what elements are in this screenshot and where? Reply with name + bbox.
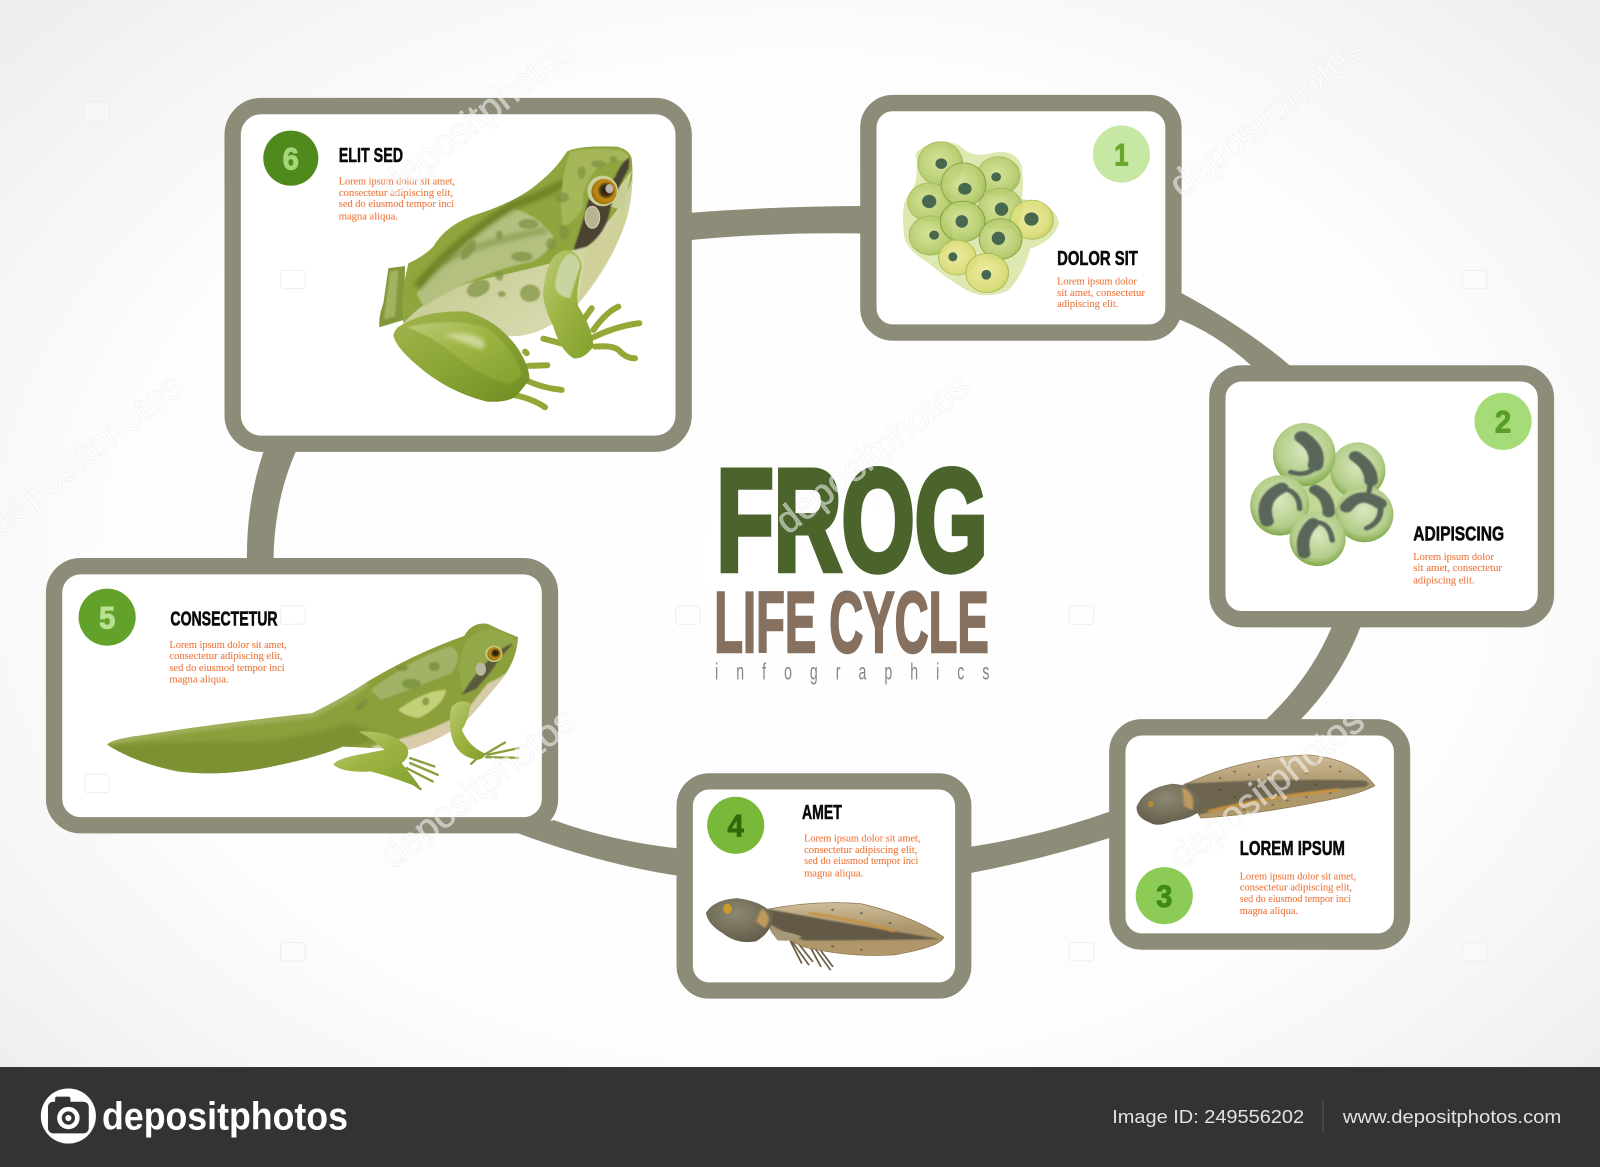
watermark: depositphotos overlay: depositphotos	[372, 27, 583, 205]
number badge 5: 5	[99, 599, 115, 635]
heading: adipiscing: ADIPISCING	[1413, 524, 1504, 546]
number badge 3	[1136, 867, 1193, 924]
text block step 3: Lorem ipsum dolor sit amet,	[1240, 870, 1356, 882]
heading: amet: AMET	[802, 802, 842, 824]
text block step 4	[804, 833, 921, 879]
number badge 4	[707, 797, 764, 854]
heading: elit sed: ELIT SED	[339, 145, 403, 167]
text block step 3: sed do eiusmod tempor inci	[1240, 893, 1351, 905]
text block step 5	[169, 639, 287, 685]
icon: camera logo	[41, 1088, 96, 1144]
illustration: adult frog	[379, 137, 647, 407]
text block step 6: consectetur adipiscing elit,	[339, 187, 453, 199]
number badge 1	[1093, 125, 1150, 183]
text block step 6: sed do eiusmod tempor inci	[339, 198, 454, 210]
image id: Image ID: 249556202	[1112, 1106, 1304, 1127]
heading: lorem ipsum: LOREM IPSUM	[1240, 838, 1345, 860]
text block step 2	[1413, 551, 1502, 586]
text block step 6: Lorem ipsum dolor sit amet,	[339, 176, 455, 188]
text block step 4: Lorem ipsum dolor sit amet,	[804, 833, 921, 845]
text block step 1: adipiscing elit.	[1057, 298, 1118, 310]
number badge 1: 1	[1114, 136, 1129, 172]
illustration: tadpole	[1137, 755, 1375, 825]
watermark: depositphotos overlay: depositphotos	[372, 699, 583, 876]
number badge 2	[1474, 393, 1532, 450]
panel: step 6 adult frog	[233, 106, 684, 444]
number badge 2: 2	[1495, 404, 1511, 440]
text block step 1: sit amet, consectetur	[1057, 287, 1145, 299]
logo wordmark: depositphotos	[102, 1095, 348, 1138]
cycle ring connecting the panels	[247, 206, 1362, 876]
website url: www.depositphotos.com	[1342, 1106, 1561, 1127]
text block step 4: magna aliqua.	[804, 867, 863, 879]
title	[714, 439, 989, 685]
panel: step 1 frogspawn eggs	[868, 103, 1173, 333]
panel: step 5 froglet with tail	[54, 566, 550, 825]
text block step 6: magna aliqua.	[339, 210, 398, 222]
watermark: depositphotos overlay: depositphotos	[1161, 699, 1372, 876]
title: frog: FROG	[716, 439, 988, 601]
illustration: egg cluster	[903, 141, 1059, 295]
text block step 3: magna aliqua.	[1240, 905, 1298, 917]
text block step 2: adipiscing elit.	[1413, 575, 1474, 586]
heading: dolor sit: DOLOR SIT	[1057, 248, 1138, 270]
panel: step 2 embryos in eggs	[1217, 373, 1546, 619]
text block step 6	[339, 176, 455, 222]
number badge 4: 4	[728, 807, 744, 843]
text block step 5: Lorem ipsum dolor sit amet,	[169, 639, 287, 651]
text block step 1: Lorem ipsum dolor	[1057, 276, 1137, 288]
text block step 3	[1240, 870, 1356, 917]
illustration: froglet	[102, 616, 526, 789]
watermark: depositphotos overlay	[0, 27, 1487, 961]
text block step 4: sed do eiusmod tempor inci	[804, 855, 918, 867]
panel: step 4 tadpole with legs	[685, 781, 963, 991]
text block step 5: sed do eiusmod tempor inci	[169, 662, 285, 674]
subtitle: infographics: infographics	[715, 659, 989, 685]
watermark: depositphotos overlay: depositphotos	[767, 364, 978, 542]
number badge 3: 3	[1156, 878, 1172, 914]
text block step 5: magna aliqua.	[169, 673, 229, 685]
title: life cycle: LIFE CYCLE	[714, 574, 989, 671]
number badge 6: 6	[283, 140, 299, 176]
footer bar	[0, 1067, 1600, 1167]
text block step 2: Lorem ipsum dolor	[1413, 551, 1494, 563]
heading: consectetur: CONSECTETUR	[170, 608, 278, 630]
panel: step 3 tadpole	[1117, 727, 1402, 942]
text block step 1	[1057, 276, 1145, 310]
illustration: eggs with embryos	[1250, 423, 1393, 566]
text block step 4: consectetur adipiscing elit,	[804, 844, 918, 856]
number badge 5	[79, 589, 136, 646]
text block step 3: consectetur adipiscing elit,	[1240, 882, 1352, 894]
watermark: depositphotos overlay: depositphotos	[1161, 27, 1372, 205]
text block step 2: sit amet, consectetur	[1413, 562, 1502, 574]
illustration: tadpole with hind legs	[706, 898, 944, 970]
text block step 5: consectetur adipiscing elit,	[169, 650, 283, 662]
number badge 6	[263, 131, 318, 186]
